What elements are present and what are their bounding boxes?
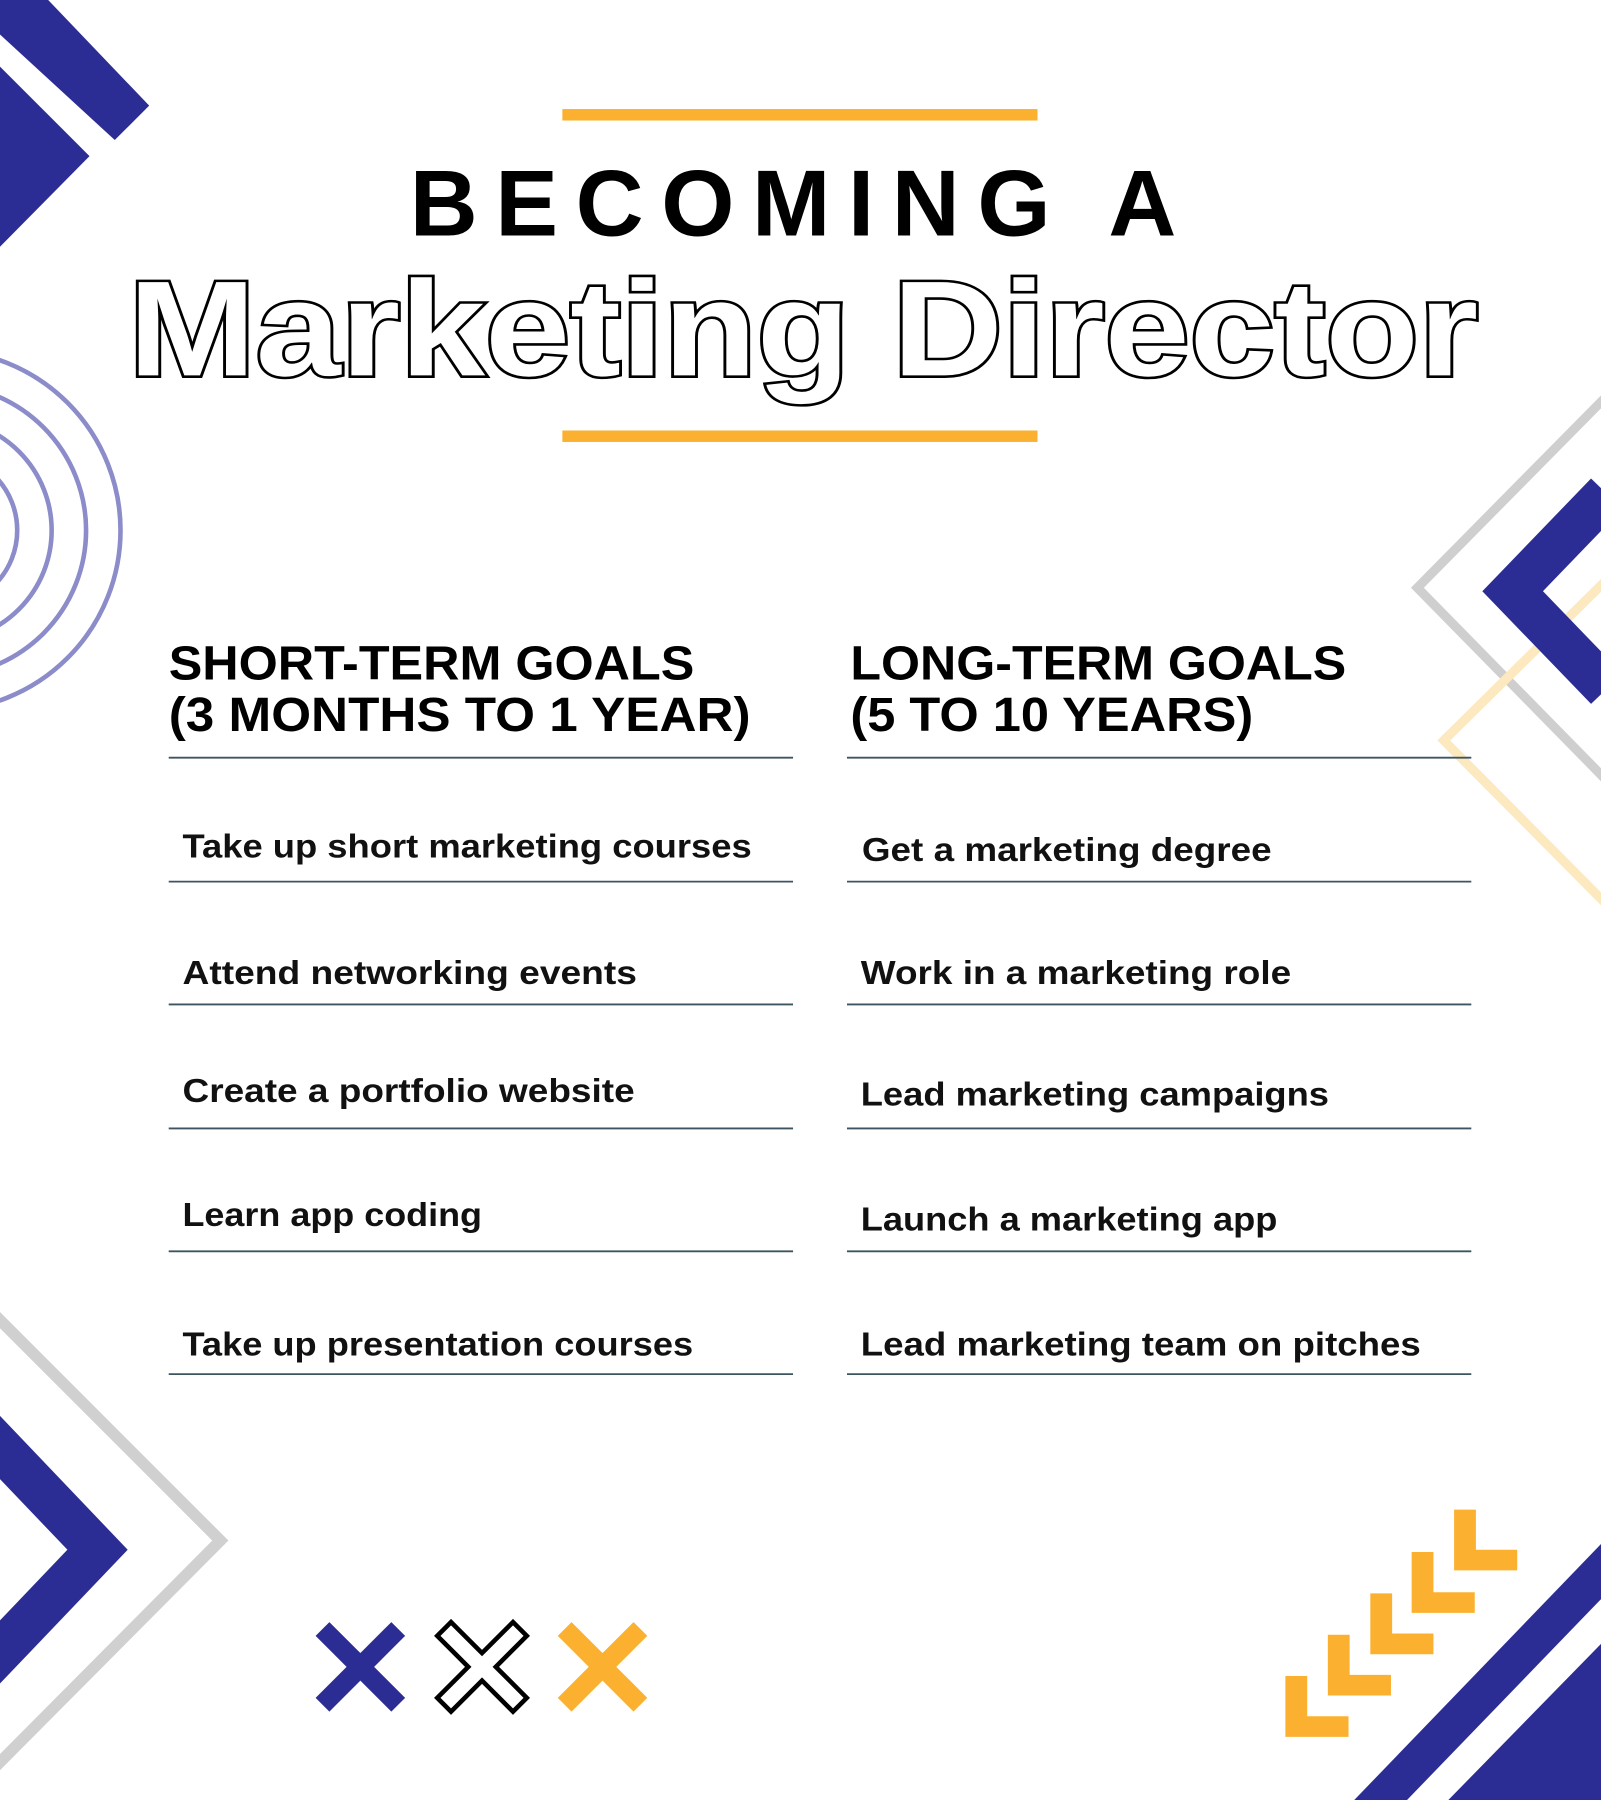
panel: long-term goals: Get a marketing degree	[862, 832, 1272, 869]
panel: long-term goals: (5 TO 10 YEARS)	[850, 688, 1253, 742]
panel: short-term goals: Attend networking events	[182, 955, 637, 992]
decoration: bottom-left chevrons	[0, 1314, 220, 1768]
icon: yellow L steps	[1285, 1510, 1517, 1737]
panel: short-term goals: Learn app coding	[182, 1197, 482, 1234]
panel: long-term goals: Lead marketing team on pitches	[861, 1327, 1421, 1364]
panel: long-term goals: Launch a marketing app	[861, 1202, 1277, 1239]
panel: long-term goals: LONG-TERM GOALS	[850, 637, 1346, 691]
title	[129, 109, 1478, 442]
decoration: right chevrons	[1417, 396, 1601, 905]
panel: long-term goals: Lead marketing campaigns	[861, 1076, 1329, 1113]
panel: long-term goals	[847, 637, 1471, 1374]
panel: short-term goals: Take up presentation courses	[182, 1327, 693, 1364]
title: Marketing Director	[129, 252, 1478, 404]
panel: short-term goals: (3 MONTHS TO 1 YEAR)	[169, 688, 751, 742]
title: BECOMING A	[410, 150, 1176, 255]
decoration: concentric arcs	[0, 350, 121, 711]
decoration: top-left blue chevrons	[0, 0, 149, 247]
panel: short-term goals: Create a portfolio website	[182, 1073, 635, 1110]
panel: short-term goals: SHORT-TERM GOALS	[169, 637, 694, 691]
icon: three X marks	[316, 1622, 647, 1712]
panel: short-term goals	[169, 637, 793, 1374]
panel: short-term goals: Take up short marketing courses	[182, 829, 752, 866]
panel: long-term goals: Work in a marketing role	[861, 955, 1291, 992]
decoration: bottom-right blue stripes	[1354, 1544, 1601, 1800]
